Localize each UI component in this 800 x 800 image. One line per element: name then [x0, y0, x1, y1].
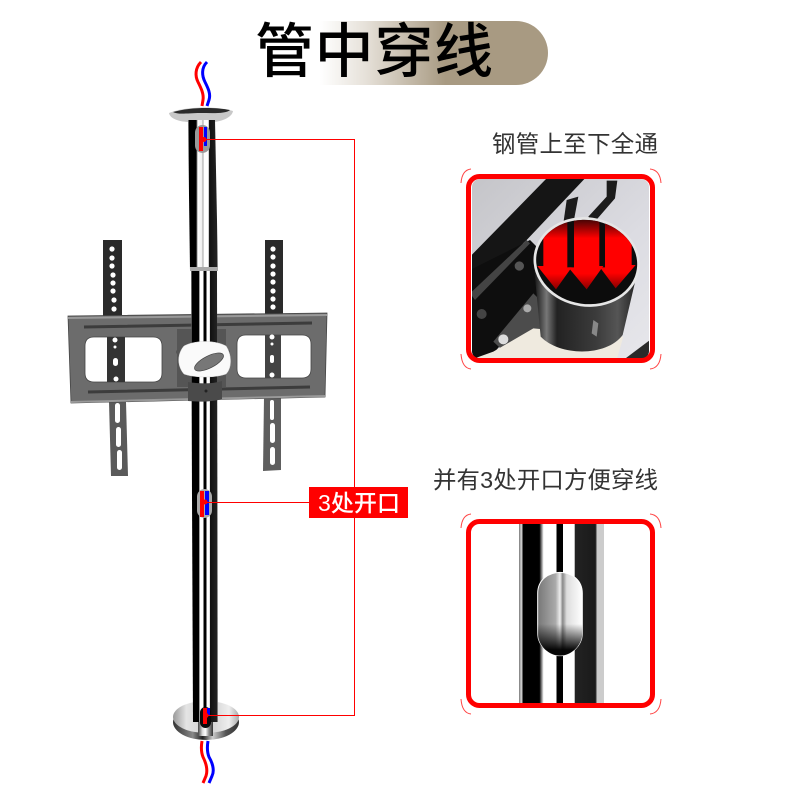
corner arcs — [461, 169, 661, 369]
title: 管中穿线 — [255, 19, 493, 85]
cables at top — [196, 62, 210, 106]
mounting plate — [68, 313, 327, 403]
bracket lines marking openings — [202, 137, 354, 718]
panel: slot close-up — [461, 514, 661, 714]
label: 3 openings: 3处开口 — [318, 490, 400, 516]
caption: bottom: 并有3处开口方便穿线 — [433, 467, 658, 493]
photo — [472, 179, 649, 358]
bottom flange — [173, 701, 239, 740]
pole close-up — [519, 524, 604, 704]
label: 3 openings — [309, 487, 408, 518]
bracket visible through left window — [107, 337, 125, 382]
pole shaft — [188, 120, 218, 736]
top slot — [195, 125, 210, 153]
bottom slot — [200, 707, 211, 728]
cables at bottom — [201, 741, 213, 783]
corner arcs — [461, 514, 661, 714]
bracket upper right — [265, 240, 283, 316]
bracket visible through right window — [265, 334, 281, 378]
bracket lower left — [109, 402, 128, 476]
top flange — [169, 107, 233, 122]
slot — [538, 572, 582, 656]
bracket upper left — [103, 240, 122, 318]
clamp — [176, 342, 230, 377]
frame — [468, 522, 652, 706]
middle slot — [197, 489, 212, 518]
bracket lower right — [263, 397, 281, 471]
frame — [468, 176, 652, 360]
panel: pipe cross-section photo — [461, 169, 661, 369]
caption: top: 钢管上至下全通 — [492, 131, 658, 157]
collar — [188, 381, 222, 402]
product: ceiling TV mount pole — [68, 62, 327, 783]
